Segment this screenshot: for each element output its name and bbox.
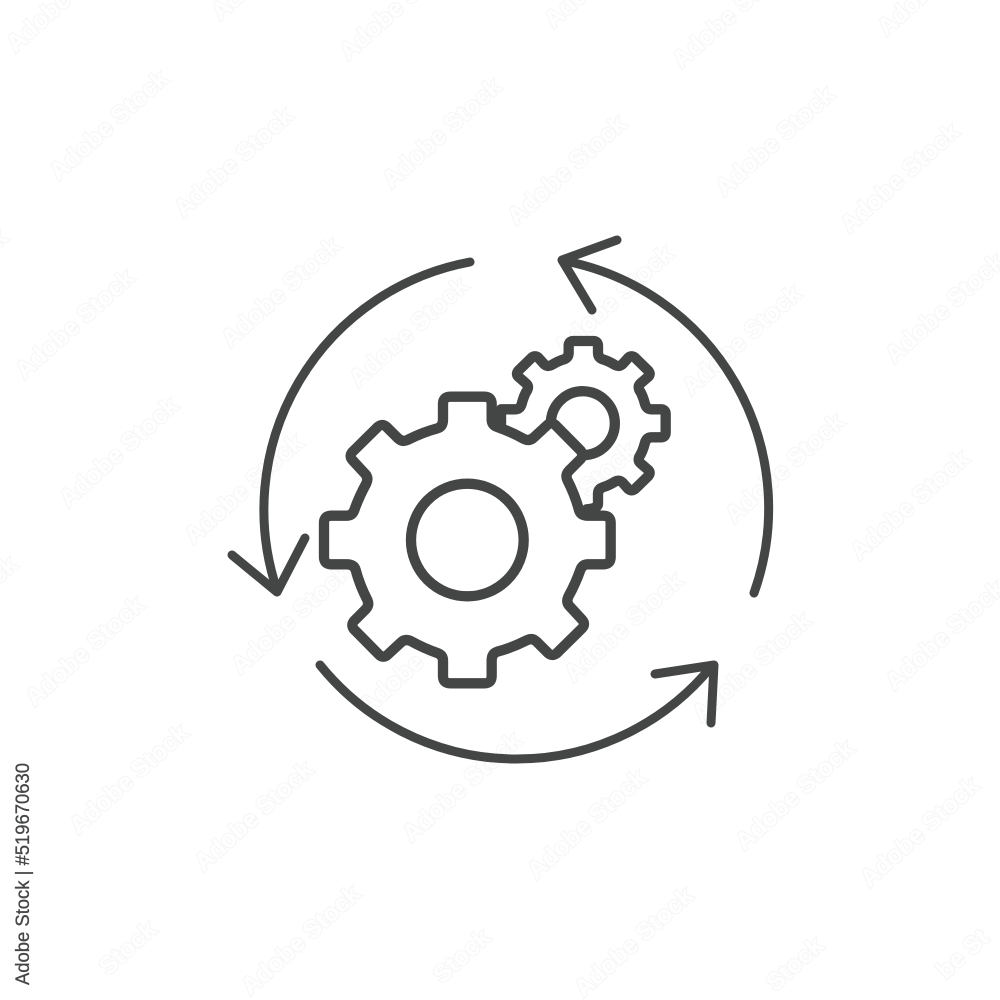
watermark pattern: Adobe Stock	[522, 764, 652, 885]
watermark pattern: Adobe Stock	[226, 559, 356, 680]
circular arrows	[232, 240, 769, 759]
large gear hub circle	[411, 484, 524, 596]
arrow: left arc	[232, 262, 470, 592]
watermark pattern: Adobe Stock	[549, 240, 679, 361]
watermark pattern: Adobe Stock	[387, 400, 517, 521]
watermark pattern: Adobe Stock	[354, 599, 484, 720]
watermark pattern: Adobe Stock	[216, 232, 346, 353]
watermark pattern: Adobe Stock	[730, 735, 860, 856]
watermark pattern: Adobe Stock	[189, 756, 319, 877]
watermark pattern: Adobe Stock	[344, 272, 474, 393]
icon: small gear	[501, 341, 666, 509]
watermark pattern: Adobe Stock	[44, 65, 174, 186]
watermark pattern: Adobe Stock	[20, 591, 150, 712]
arrow: top right clockwise arc	[562, 240, 769, 593]
watermark pattern: Adobe Stock	[54, 392, 184, 513]
watermark pattern: Adobe Stock	[687, 607, 817, 728]
vertical stock id text: Adobe Stock | #519670630	[13, 763, 34, 985]
watermark pattern: Adobe Stock	[569, 882, 699, 1000]
watermark pattern: Stock	[428, 924, 496, 989]
watermark pattern: Adobe Stock	[64, 719, 194, 840]
watermark pattern: Adobe Stock	[377, 73, 507, 194]
watermark pattern: Adobe Stock	[10, 264, 140, 385]
watermark pattern: Adobe Stock	[677, 280, 807, 401]
watermark pattern: Adobe Stock	[236, 880, 366, 1000]
watermark pattern: Adobe Stock	[559, 567, 689, 688]
watermark pattern: Adobe Stock	[169, 102, 299, 223]
watermark pattern: Stock	[94, 916, 162, 981]
watermark pattern: be St	[932, 924, 994, 985]
watermark pattern: Adobe Stock	[835, 118, 965, 239]
watermark pattern: Adobe Stock	[397, 727, 527, 848]
watermark pattern: Stock	[761, 932, 829, 997]
watermark pattern: Adobe Stock	[502, 110, 632, 231]
icon: large gear	[324, 397, 611, 683]
watermark pattern: Adobe Stock	[720, 408, 850, 529]
watermark pattern: Adobe Stock	[710, 81, 840, 202]
icon: gears	[324, 341, 666, 683]
small gear hub arc	[551, 391, 615, 455]
watermark pattern: Adobe Stock	[179, 429, 309, 550]
watermark pattern: Adobe Stock	[845, 445, 975, 566]
watermark pattern: Adobe Stock	[512, 437, 642, 558]
watermark pattern: Adobe Stock	[855, 772, 985, 893]
arrow: bottom arc	[320, 665, 714, 759]
